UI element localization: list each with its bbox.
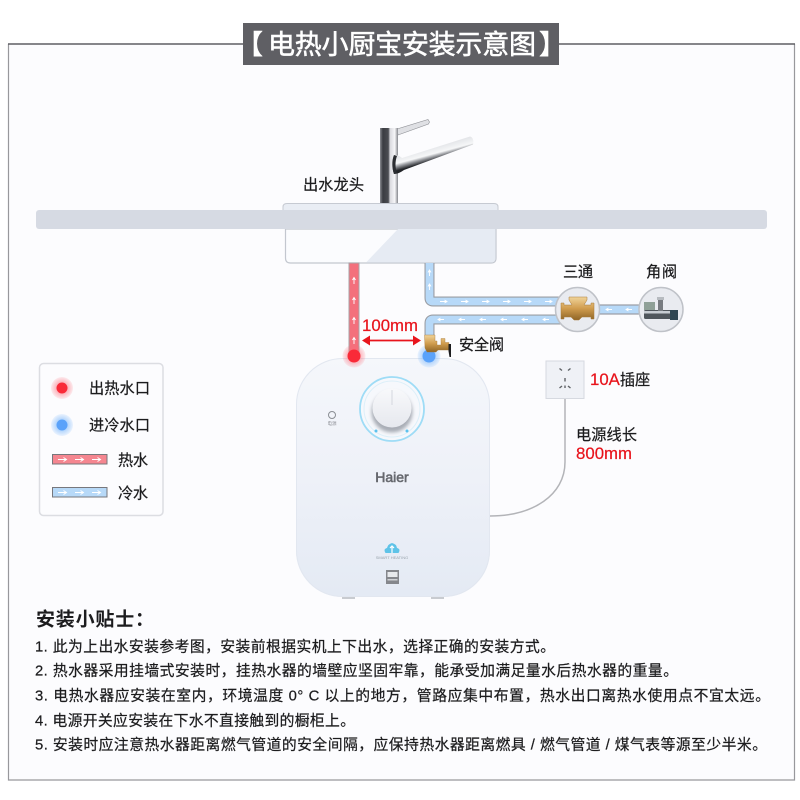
- water outlet ports: [342, 344, 440, 368]
- power cord: [490, 398, 565, 516]
- icon: energy label: [386, 570, 399, 584]
- legend: cold inlet: 进冷水口: [89, 418, 150, 434]
- hot water pipe: [349, 263, 359, 356]
- legend: cold pipe: [52, 486, 148, 502]
- cold water pipes: [428, 263, 643, 340]
- label: cord length: 800mm: [576, 444, 632, 463]
- label: cord length: 电源线长: [576, 427, 637, 444]
- tip 3: 3. 电热水器应安装在室内，环境温度 0° C 以上的地方，管路应集中布置，热水出口离热水使用点不宜太远。: [35, 686, 770, 704]
- icon: wall socket: [546, 361, 584, 398]
- label: safety valve: 安全阀: [459, 336, 504, 354]
- tip 2: 2. 热水器采用挂墙式安装时，挂热水器的墙壁应坚固牢靠，能承受加满足量水后热水器的重量。: [35, 662, 678, 680]
- legend: hot pipe: 热水: [118, 452, 148, 470]
- icon: tee fitting: [556, 288, 600, 332]
- control knob: [360, 377, 424, 441]
- brand logo: Haier: [375, 469, 409, 485]
- sink basin: [283, 204, 498, 263]
- dimension: 100mm: 100mm: [362, 316, 418, 335]
- label: cord length: [576, 427, 637, 463]
- icon: faucet: [380, 120, 473, 204]
- title banner: [236, 23, 566, 65]
- tips heading: 安装小贴士：: [36, 608, 154, 630]
- dimension: 100mm: [362, 316, 421, 346]
- legend: hot pipe: [52, 452, 148, 470]
- icon: safety valve: [424, 335, 451, 357]
- label: faucet: 出水龙头: [303, 177, 364, 194]
- title banner: 【: [236, 30, 263, 60]
- legend: cold inlet: [51, 414, 150, 436]
- label: tee: 三通: [563, 264, 593, 281]
- countertop: [36, 210, 767, 229]
- icon: angle valve: [639, 288, 683, 332]
- power indicator: [328, 412, 337, 427]
- legend panel: [40, 364, 163, 516]
- title banner: 】: [539, 30, 566, 60]
- icon: cloud badge: [376, 543, 408, 560]
- tip 1: 1. 此为上出水安装参考图，安装前根据实机上下出水，选择正确的安装方式。: [35, 638, 555, 656]
- installation tips: [35, 608, 770, 754]
- icon: cloud badge: SMART HEATING: [376, 555, 408, 560]
- water heater body: [296, 358, 490, 599]
- label: angle valve: 角阀: [646, 264, 677, 281]
- legend: hot outlet: [51, 377, 150, 399]
- power indicator: 电源: [328, 420, 337, 427]
- tip 4: 4. 电源开关应安装在下水不直接触到的橱柜上。: [35, 712, 355, 730]
- legend: cold pipe: 冷水: [118, 486, 148, 502]
- title banner: 电热小厨宝安装示意图: [268, 30, 536, 60]
- legend: hot outlet: 出热水口: [89, 380, 150, 398]
- tip 5: 5. 安装时应注意热水器距离燃气管道的安全间隔，应保持热水器距离燃具 / 燃气管道 / 煤气表等源至少半米。: [35, 736, 767, 754]
- label: socket: 10A插座: [590, 370, 650, 389]
